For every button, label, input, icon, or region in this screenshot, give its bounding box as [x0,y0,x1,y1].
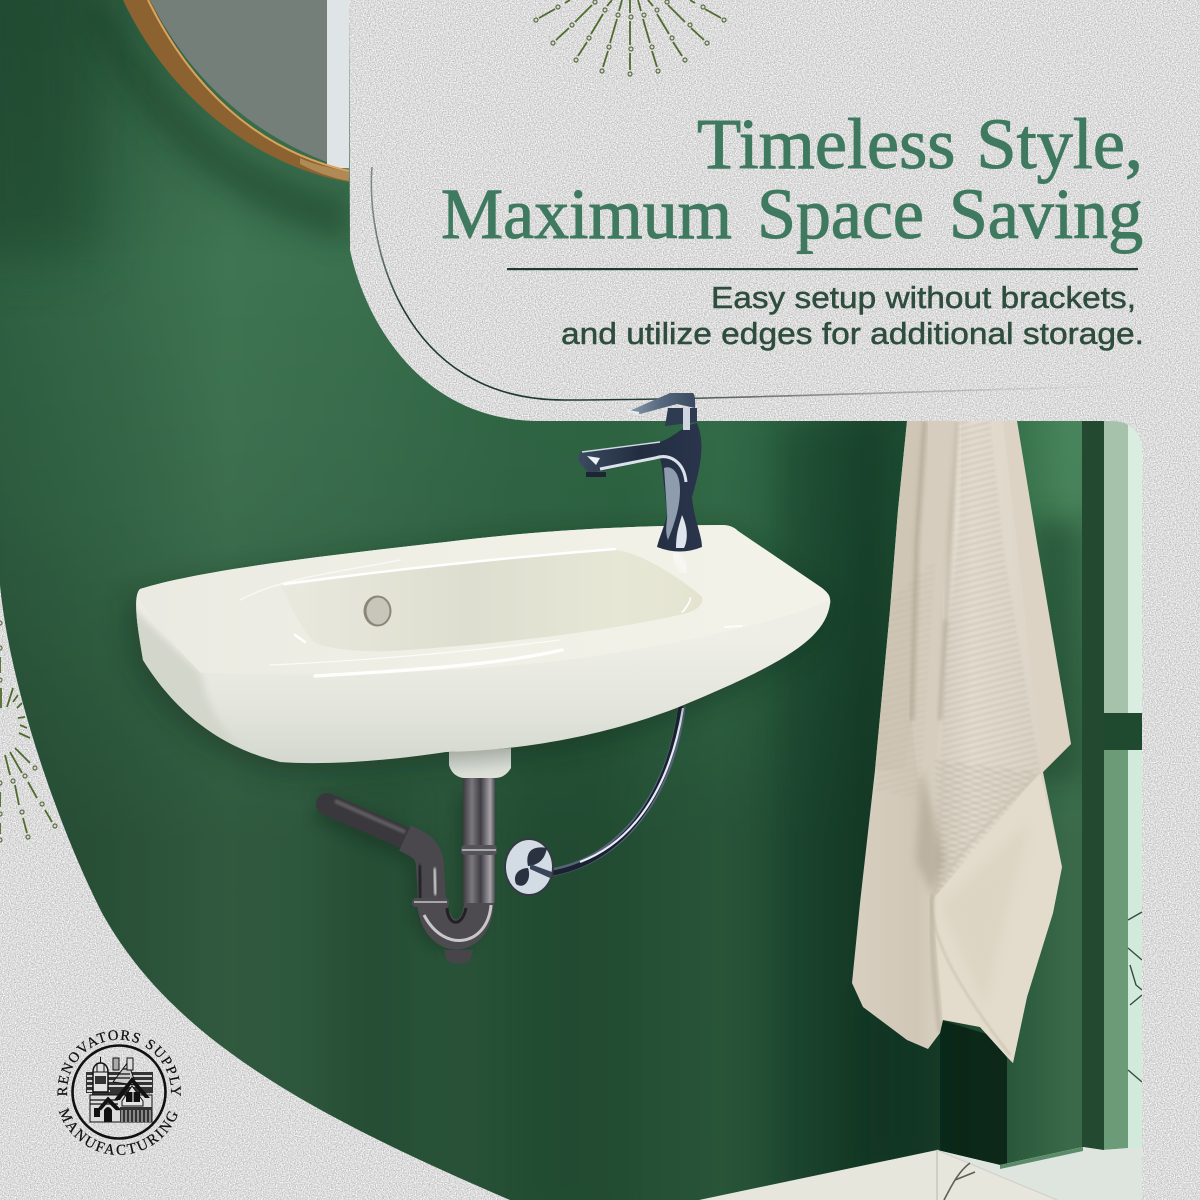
logo: Renovators Supply Manufacturing [57,1030,181,1155]
logo top text: RENOVATORS SUPPLY [57,1030,181,1096]
overflow hole [364,596,392,626]
marble floor [699,1147,1142,1200]
title divider [507,268,1138,270]
logo bottom text: MANUFACTURING [58,1107,178,1155]
mirror with gold frame [80,0,349,240]
subtitle: Easy setup without brackets, [711,280,1136,315]
subtitle: and utilize edges for additional storage. [561,316,1144,351]
faucet [578,393,702,552]
logo house [86,1057,153,1122]
sink basin [281,550,702,651]
sink drain neck [449,748,511,778]
title: Maximum Space Saving [441,174,1143,254]
sparkle: top burst [534,0,726,76]
sparkle: left burst [0,621,57,842]
title: Timeless Style, [697,104,1143,184]
thin curved accent line [371,167,1120,400]
title [441,104,1143,254]
sink highlights [240,549,742,676]
window frame on the right [1082,421,1142,1151]
towel [850,421,1075,1066]
sink drain trap [318,778,497,964]
subtitle [561,280,1144,351]
supply hose [553,706,683,873]
wall sink [120,525,830,775]
sink hole insert [366,598,390,624]
wall escutcheon [504,838,554,896]
